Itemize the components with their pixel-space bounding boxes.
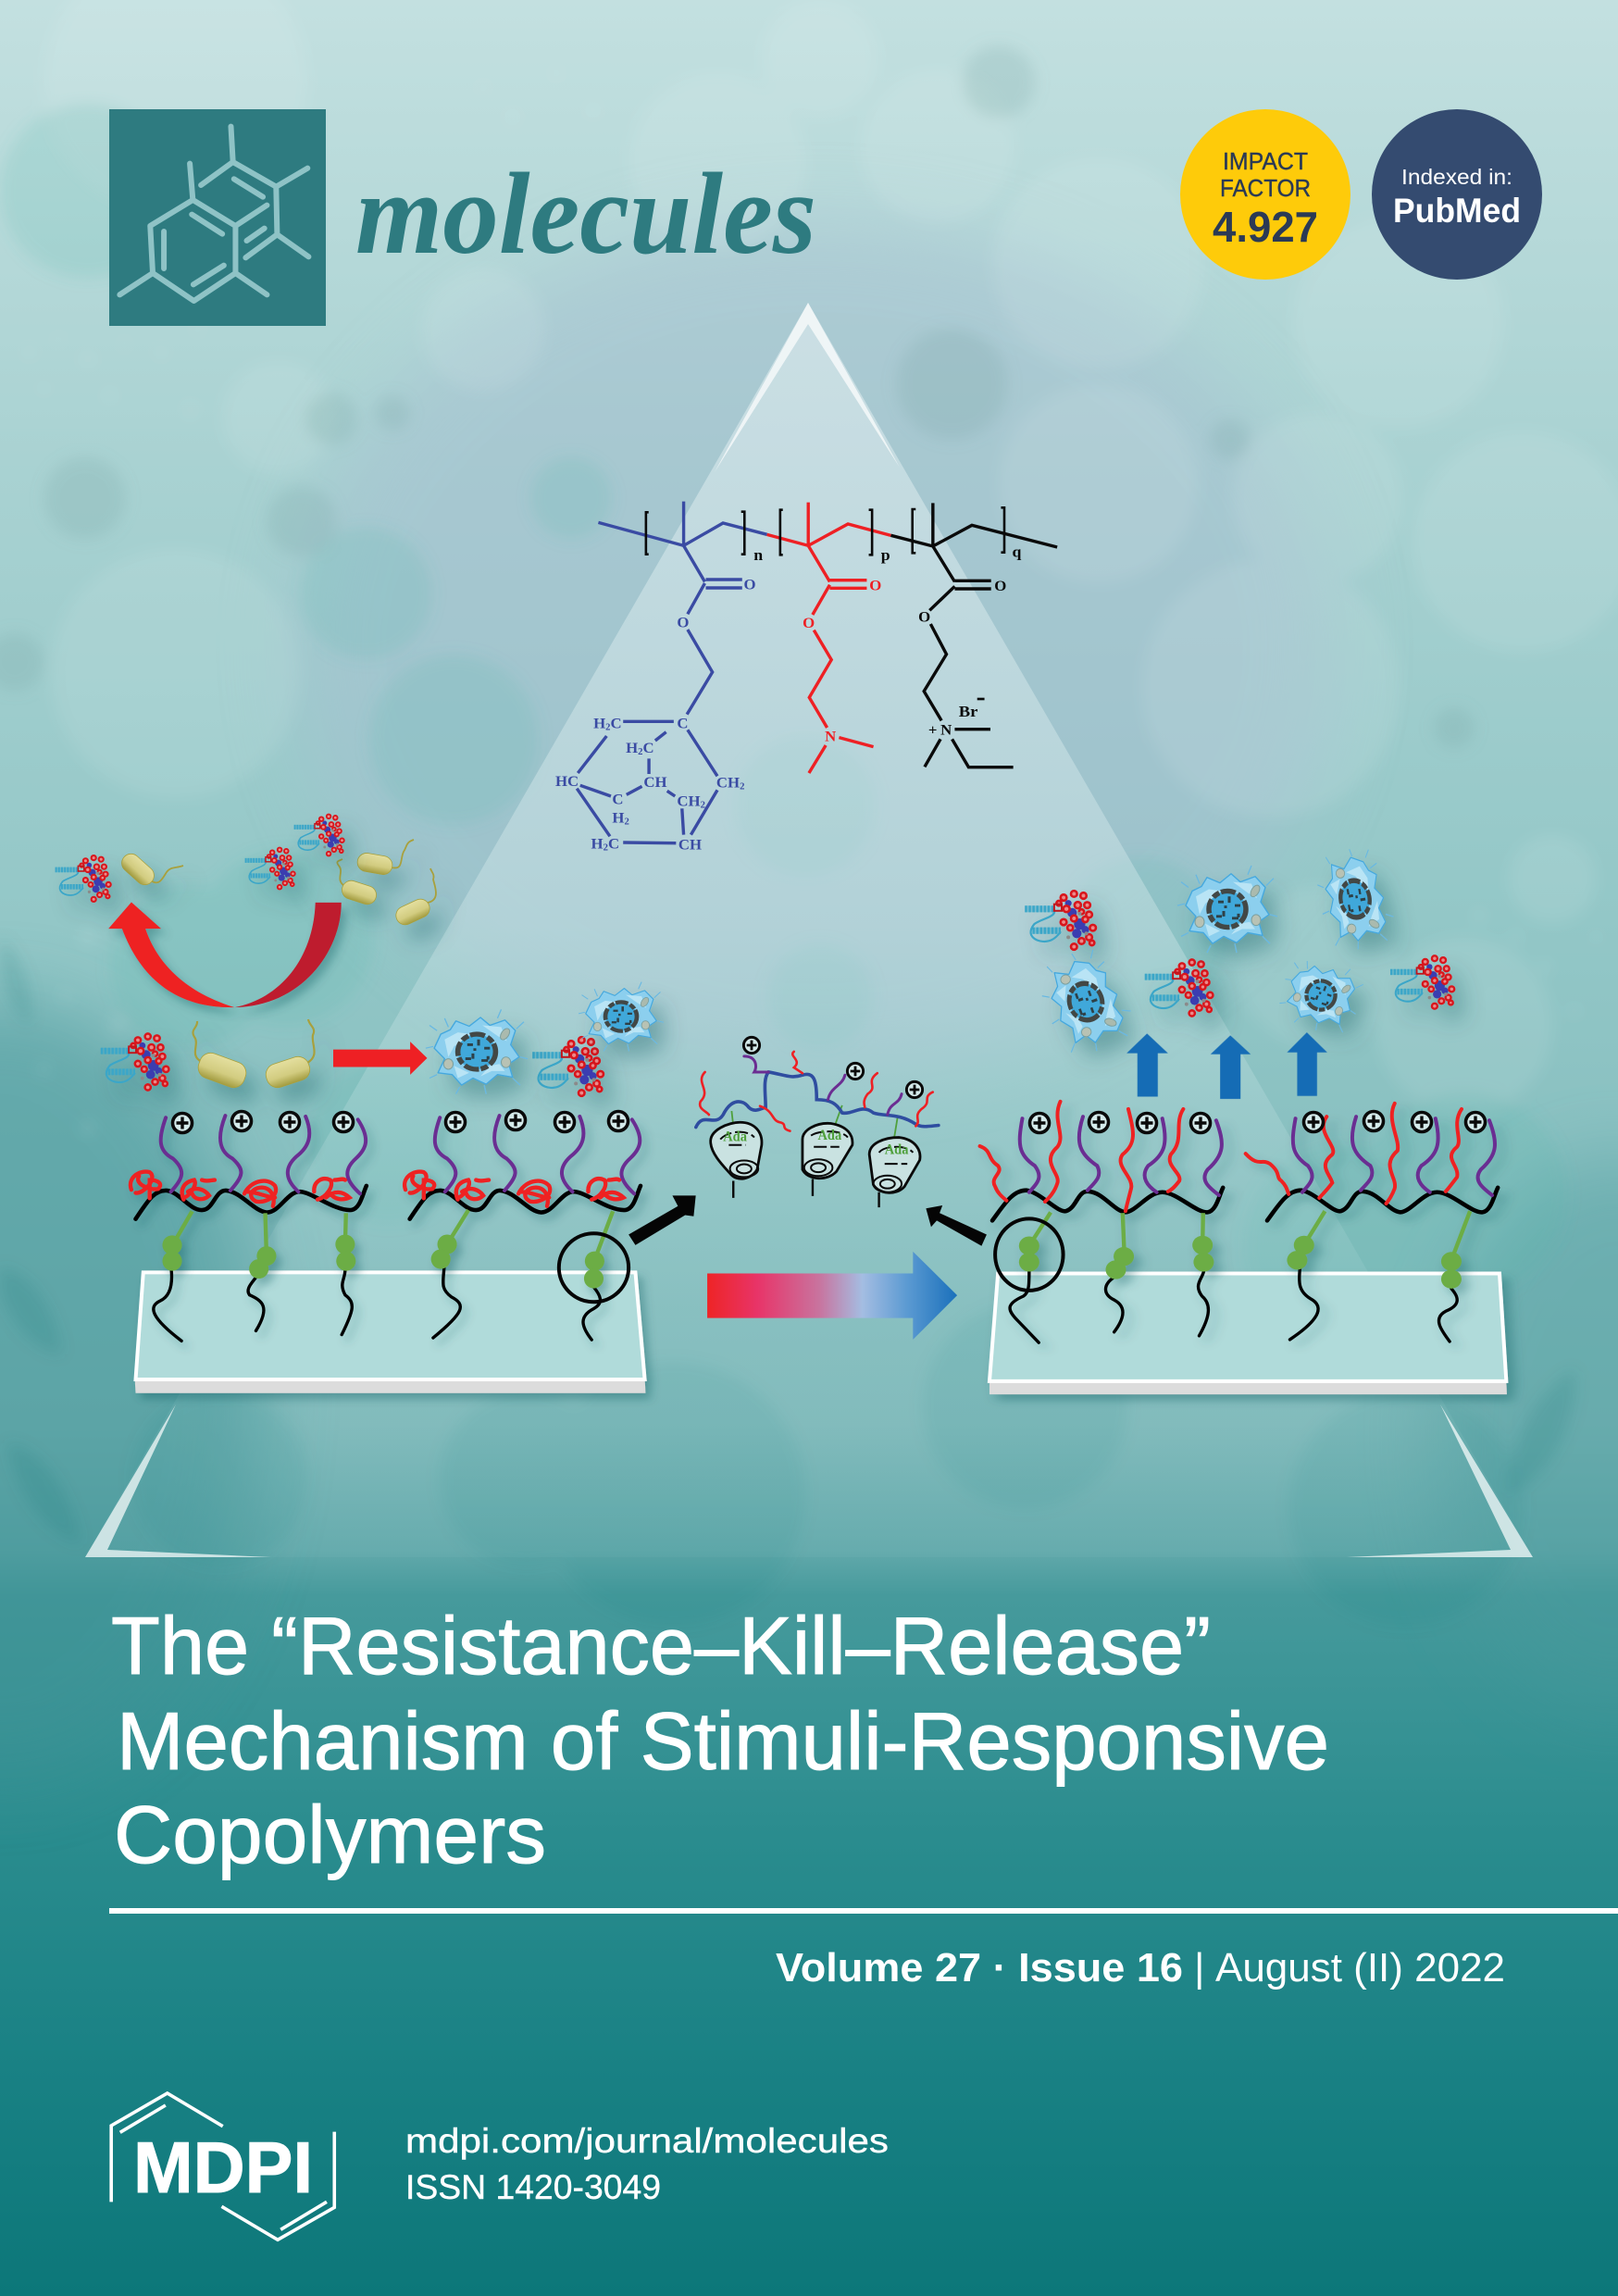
blue monomer unit: C: [608, 836, 619, 852]
bacteria: [118, 840, 436, 1091]
black monomer unit: [890, 503, 1057, 767]
badge: impact factor: [1180, 109, 1350, 280]
brackets and repeat-unit subscripts: n: [753, 547, 764, 564]
black monomer unit: O: [918, 609, 930, 625]
red monomer unit: [767, 503, 890, 773]
blue monomer unit: H: [591, 836, 604, 852]
host-guest polymer with Ada and cyclodextrin cups: Ada: [885, 1142, 909, 1157]
badge: indexed in PubMed: [1372, 109, 1542, 280]
title: Copolymers: [114, 1789, 546, 1880]
title: The “Resistance–Kill–Release”: [111, 1600, 1211, 1691]
blue monomer unit: 2: [740, 782, 744, 792]
blue monomer unit: H: [612, 810, 624, 826]
resistance state: left copolymer brushes: [131, 1116, 641, 1341]
killed bacteria debris: [426, 843, 1398, 1094]
red monomer unit: N: [825, 729, 836, 745]
host-guest polymer with Ada and cyclodextrin cups: Ada: [723, 1129, 747, 1145]
blue monomer unit: CH: [643, 774, 667, 791]
title rule: [109, 1908, 1618, 1914]
blue monomer unit: O: [744, 577, 756, 593]
arrow: black from right anchor: [926, 1205, 987, 1246]
red monomer unit: O: [869, 578, 881, 593]
MDPI logo: MDPI: [133, 2127, 313, 2208]
journal URL: mdpi.com/journal/molecules: [405, 2122, 889, 2160]
charge markers on free polymer: [743, 1037, 923, 1098]
title: Mechanism of Stimuli-Responsive: [117, 1695, 1329, 1787]
selection circle: left anchor: [559, 1233, 629, 1302]
volume and issue line: [776, 1945, 1505, 1990]
protein structures: [56, 815, 1454, 1096]
title: [111, 1600, 1329, 1880]
black monomer unit: Br: [959, 703, 977, 720]
host-guest polymer with Ada and cyclodextrin cups: [696, 1052, 939, 1207]
arrow: gradient stimulus: [707, 1252, 957, 1340]
black monomer unit: N: [940, 722, 952, 738]
blue monomer unit: 2: [604, 843, 608, 853]
arrow: small red: [333, 1042, 427, 1075]
red monomer unit: O: [803, 615, 815, 631]
blue monomer unit: 2: [638, 747, 642, 757]
journal name: molecules: [355, 150, 816, 279]
arrow: black to cleaved polymer: [629, 1195, 696, 1245]
brackets and repeat-unit subscripts: q: [1013, 543, 1022, 561]
host-guest polymer with Ada and cyclodextrin cups: Ada: [817, 1128, 841, 1143]
blue monomer unit: [555, 502, 767, 853]
blue monomer unit: CH: [677, 793, 701, 810]
blue monomer unit: 2: [605, 723, 610, 732]
journal logo: [109, 109, 326, 326]
brackets and repeat-unit subscripts: [646, 507, 1022, 564]
positive charge markers: [172, 1111, 1485, 1133]
platform: left substrate: [135, 1272, 645, 1393]
blue monomer unit: H: [626, 740, 638, 756]
chemical structure of copolymer: [555, 502, 1057, 853]
blue monomer unit: O: [677, 615, 689, 630]
black monomer unit: O: [994, 578, 1006, 594]
blue monomer unit: CH: [716, 775, 740, 792]
badge: impact factor: FACTOR: [1220, 174, 1311, 202]
blue monomer unit: 2: [624, 817, 629, 827]
black monomer unit: +: [928, 722, 937, 738]
release state: right copolymer brushes: [980, 1102, 1498, 1342]
blue monomer unit: C: [642, 740, 654, 756]
platform: right substrate: [989, 1274, 1507, 1394]
badge: impact factor: 4.927: [1213, 203, 1318, 251]
ISSN: ISSN 1420-3049: [405, 2168, 661, 2206]
volume and issue line: |: [1194, 1945, 1204, 1990]
volume and issue line: Volume 27 · Issue 16: [776, 1945, 1183, 1990]
blue monomer unit: HC: [555, 773, 579, 790]
blue monomer unit: C: [610, 716, 622, 731]
blue monomer unit: C: [677, 716, 689, 731]
blue monomer unit: H: [593, 716, 605, 731]
volume and issue line: August (II) 2022: [1215, 1945, 1505, 1990]
arrow: curved red release arrow: [108, 902, 342, 1007]
MDPI logo: [111, 2093, 334, 2240]
badge: indexed in PubMed: Indexed in:: [1401, 165, 1512, 189]
blue monomer unit: C: [612, 792, 624, 807]
selection circle: right anchor: [995, 1218, 1064, 1291]
large triangle frame: [85, 303, 1533, 1557]
badge: indexed in PubMed: PubMed: [1393, 192, 1521, 230]
badge: impact factor: IMPACT: [1223, 147, 1308, 175]
blue monomer unit: 2: [701, 801, 705, 811]
blue monomer unit: CH: [678, 837, 702, 853]
brackets and repeat-unit subscripts: p: [881, 547, 890, 564]
arrows: blue release: [1126, 1032, 1327, 1099]
